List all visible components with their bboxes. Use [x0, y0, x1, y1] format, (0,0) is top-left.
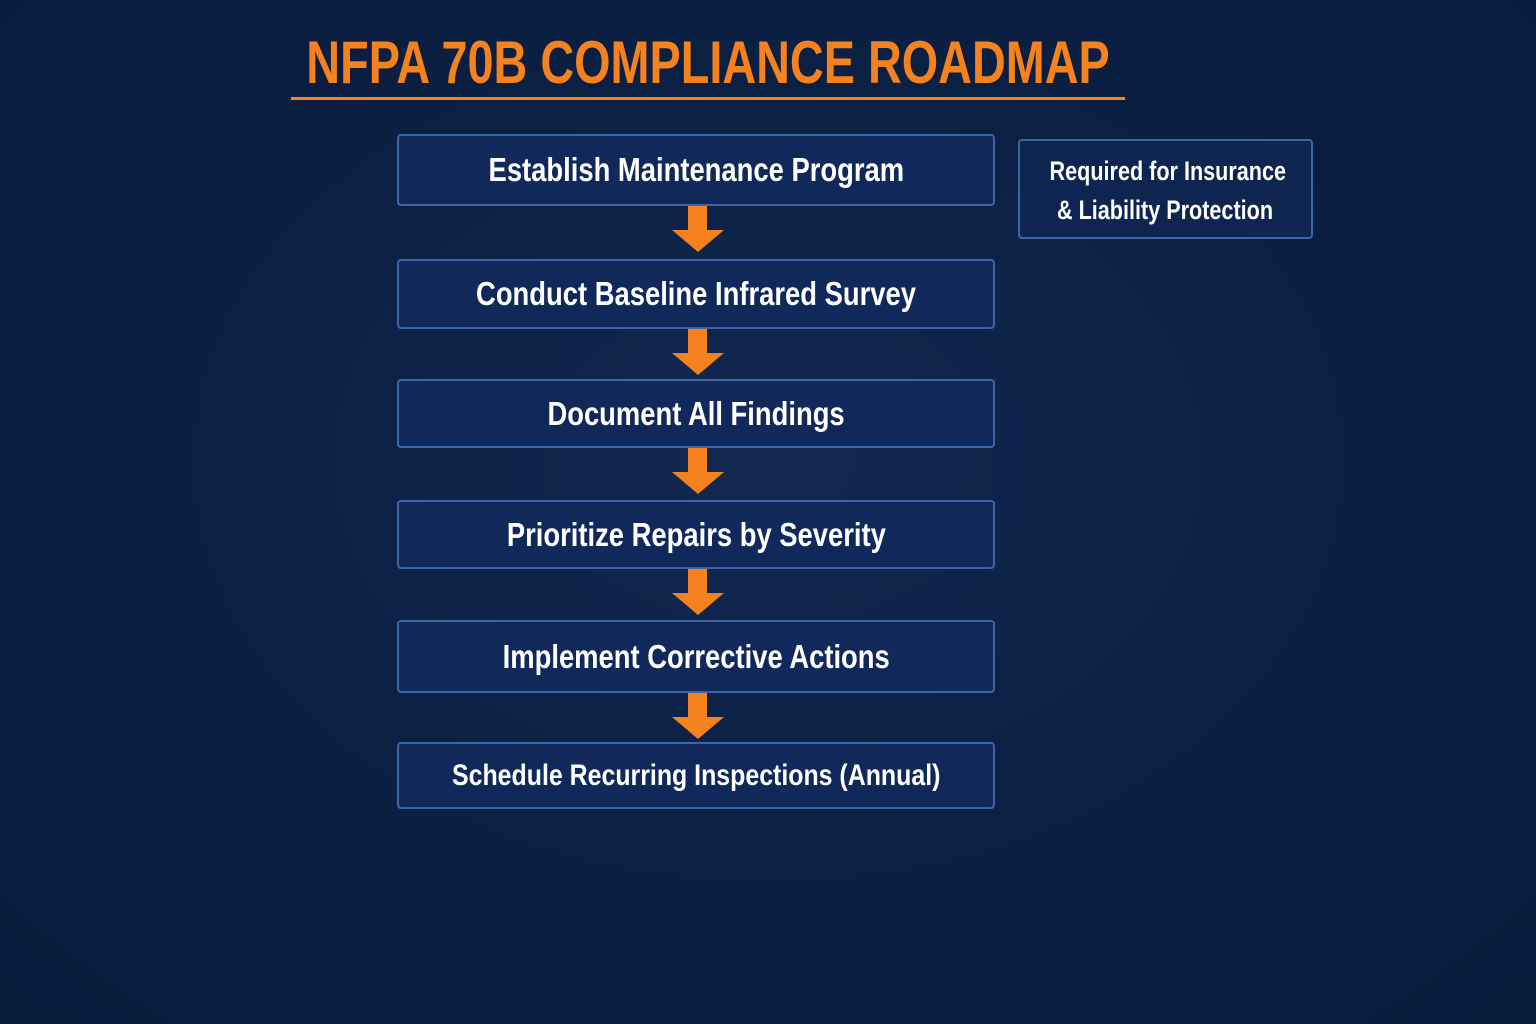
- callout: [1018, 139, 1313, 239]
- step 3: Document All Findings: [547, 394, 845, 432]
- step 1: Establish Maintenance Program: [488, 151, 904, 188]
- step 3: [397, 379, 995, 448]
- step 6: [397, 742, 995, 809]
- title: NFPA 70B COMPLIANCE ROADMAP: [306, 29, 1110, 96]
- step 4: [397, 500, 995, 569]
- callout: & Liability Protection: [1057, 195, 1274, 225]
- step 2: [397, 259, 995, 329]
- step 1: [397, 134, 995, 206]
- callout: Required for Insurance: [1050, 156, 1286, 186]
- step 2: Conduct Baseline Infrared Survey: [476, 275, 916, 312]
- arrow 5: [672, 693, 724, 739]
- arrow 4: [672, 569, 724, 615]
- step 5: Implement Corrective Actions: [502, 638, 890, 674]
- arrow 3: [672, 448, 724, 494]
- arrow 2: [672, 329, 724, 375]
- step 5: [397, 620, 995, 693]
- step 6: Schedule Recurring Inspections (Annual): [452, 758, 940, 792]
- step 4: Prioritize Repairs by Severity: [506, 516, 886, 552]
- arrow 1: [672, 206, 724, 252]
